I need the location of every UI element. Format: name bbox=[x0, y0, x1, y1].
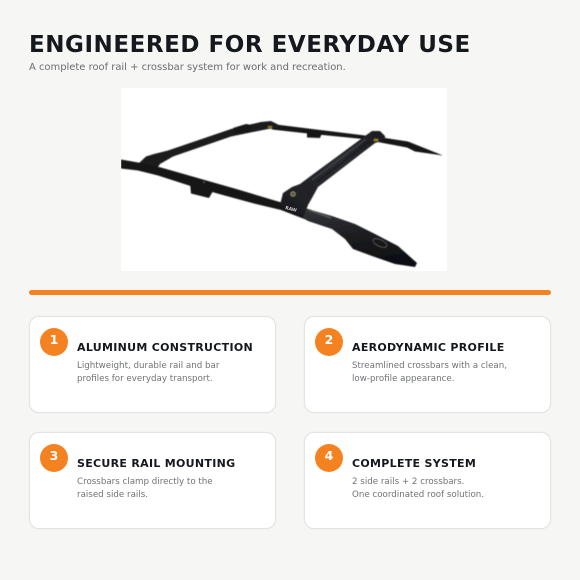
front crossbar bbox=[280, 131, 385, 216]
description bbox=[77, 361, 220, 384]
description: Lightweight, durable rail and bar bbox=[77, 361, 219, 371]
number badge 1 bbox=[40, 328, 68, 356]
description bbox=[352, 477, 484, 500]
heading: ALUMINUM CONSTRUCTION bbox=[77, 340, 253, 354]
heading: SECURE RAIL MOUNTING bbox=[77, 456, 235, 470]
product image: roof rail and crossbars bbox=[121, 88, 447, 271]
number badge 1: 1 bbox=[50, 332, 58, 347]
description: profiles for everyday transport. bbox=[77, 374, 213, 384]
number badge 4 bbox=[315, 444, 343, 472]
card 2 bbox=[304, 316, 551, 413]
title: ENGINEERED FOR EVERYDAY USE bbox=[29, 32, 471, 58]
rail tail end bbox=[303, 208, 417, 267]
number badge 2 bbox=[315, 328, 343, 356]
description bbox=[77, 477, 213, 500]
description: raised side rails. bbox=[77, 490, 148, 500]
heading: AERODYNAMIC PROFILE bbox=[352, 340, 505, 354]
number badge 3 bbox=[40, 444, 68, 472]
number badge 3: 3 bbox=[50, 448, 58, 463]
description bbox=[352, 361, 507, 384]
tail highlight bbox=[309, 210, 331, 218]
card 3 bbox=[29, 432, 276, 529]
description: low-profile appearance. bbox=[352, 374, 454, 384]
card 1 bbox=[29, 316, 276, 413]
rear crossbar bbox=[138, 121, 279, 173]
number badge 4: 4 bbox=[325, 448, 333, 463]
number badge 2: 2 bbox=[325, 332, 333, 347]
orange divider bbox=[29, 290, 551, 295]
heading: COMPLETE SYSTEM bbox=[352, 456, 476, 470]
description: One coordinated roof solution. bbox=[352, 490, 484, 500]
rear side rail bbox=[272, 124, 443, 156]
description: 2 side rails + 2 crossbars. bbox=[352, 477, 464, 487]
logo text: RAW bbox=[285, 205, 297, 214]
description: Streamlined crossbars with a clean, bbox=[352, 361, 507, 371]
description: Crossbars clamp directly to the bbox=[77, 477, 213, 487]
tail slot bbox=[372, 237, 388, 249]
subtitle: A complete roof rail + crossbar system for work and recreation. bbox=[29, 62, 346, 73]
card 4 bbox=[304, 432, 551, 529]
front side rail bbox=[121, 160, 312, 222]
